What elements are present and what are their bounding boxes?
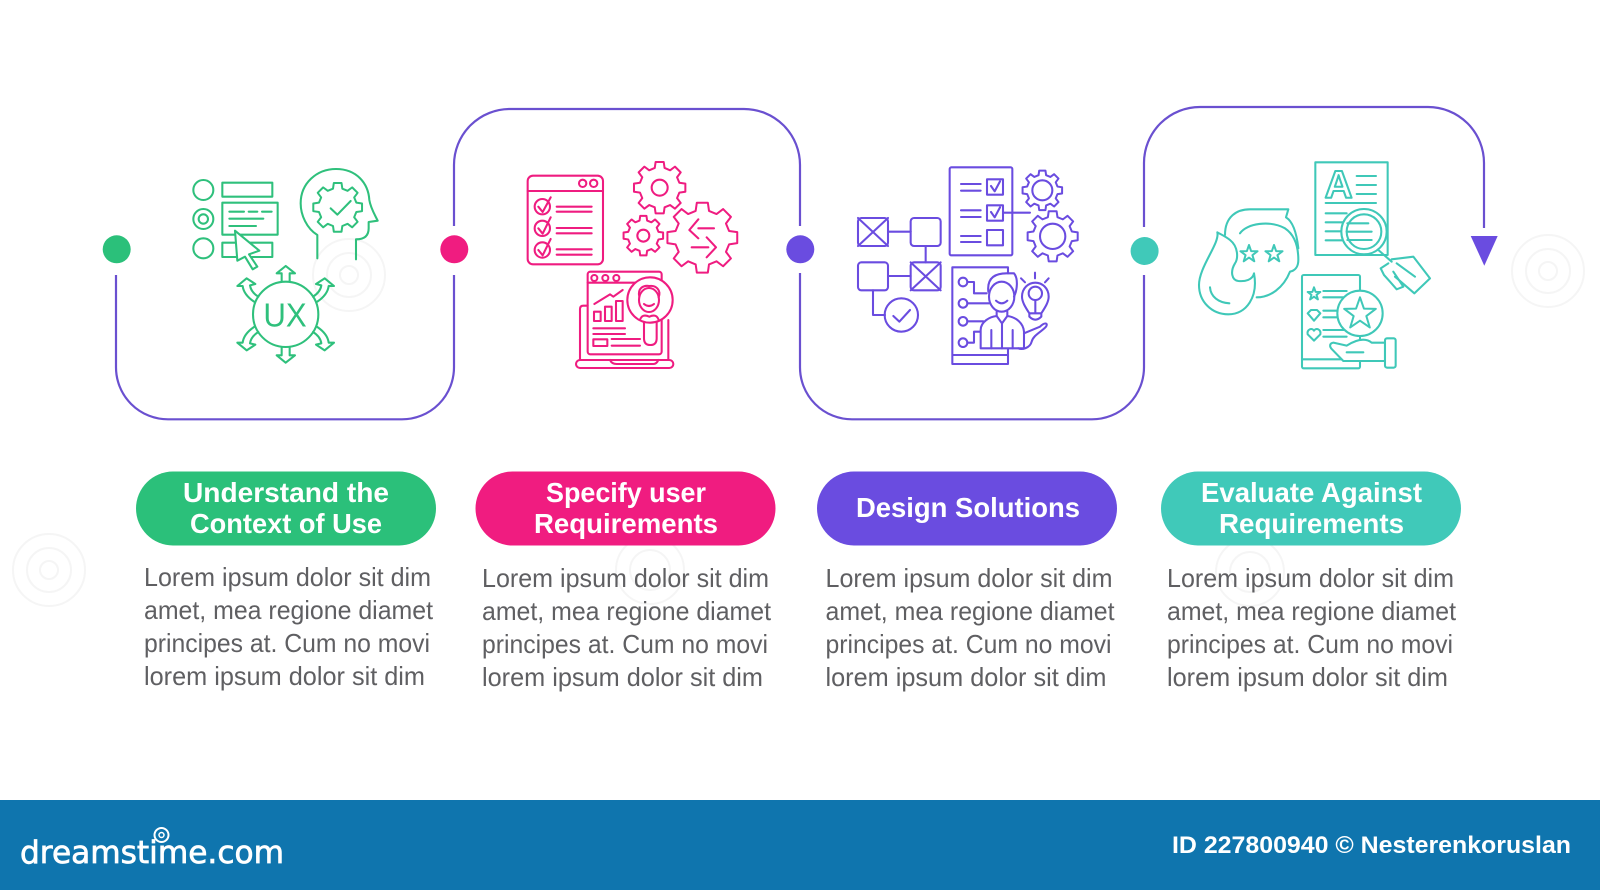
- heading: step 4: Evaluate Against: [1201, 477, 1422, 508]
- step marker: pink dot: [440, 235, 468, 263]
- text block: step 1: principes at. Cum no movi: [144, 628, 430, 658]
- icon: evaluate requirements: [1199, 162, 1430, 368]
- heading: step 2: Specify user: [546, 477, 706, 508]
- text block: step 2: principes at. Cum no movi: [482, 629, 768, 659]
- text block: step 4: principes at. Cum no movi: [1167, 629, 1453, 659]
- text block: step 3: lorem ipsum dolor sit dim: [826, 662, 1106, 692]
- text block: step 1: amet, mea regione diamet: [144, 595, 434, 625]
- panel: step 4 label: [1161, 472, 1461, 692]
- icon: evaluate requirements: A: [1325, 163, 1353, 207]
- heading: step 3: Design Solutions: [856, 492, 1080, 523]
- text block: step 3: Lorem ipsum dolor sit dim: [826, 563, 1112, 593]
- panel: step 2 label: [476, 472, 776, 692]
- footer bar: [0, 800, 1600, 890]
- text block: step 1: Lorem ipsum dolor sit dim: [144, 562, 431, 592]
- process connector line: [116, 107, 1484, 419]
- footer credit: ID 227800940 © Nesterenkoruslan: [1172, 832, 1571, 859]
- text block: step 2: Lorem ipsum dolor sit dim: [482, 563, 769, 593]
- text block: step 1: lorem ipsum dolor sit dim: [144, 661, 425, 691]
- step marker: teal dot: [1131, 237, 1159, 265]
- arrow head: [1471, 236, 1498, 266]
- heading: step 2: [534, 477, 718, 539]
- text block: step 3: amet, mea regione diamet: [826, 596, 1115, 626]
- footer logo: dreamstime.com: [20, 835, 284, 871]
- text block: step 1: [144, 562, 434, 691]
- heading: step 1: Understand the: [183, 477, 389, 508]
- heading: step 4: Requirements: [1219, 508, 1404, 539]
- panel: step 1 label: [136, 472, 436, 691]
- text block: step 3: [826, 563, 1115, 692]
- text block: step 4: lorem ipsum dolor sit dim: [1167, 662, 1448, 692]
- panel: step 3 label: [817, 472, 1117, 692]
- text block: step 4: Lorem ipsum dolor sit dim: [1167, 563, 1454, 593]
- pill: understand the context: [136, 472, 436, 546]
- heading: step 2: Requirements: [534, 508, 718, 539]
- heading: step 1: [183, 477, 389, 539]
- text block: step 4: [1167, 563, 1457, 692]
- icon: user requirements: [528, 162, 737, 368]
- pill: specify user requirements: [476, 472, 776, 546]
- step marker: purple dot: [786, 235, 814, 263]
- text block: step 2: lorem ipsum dolor sit dim: [482, 662, 763, 692]
- text block: step 2: [482, 563, 772, 692]
- icon: design solutions: [858, 167, 1078, 364]
- text block: step 4: amet, mea regione diamet: [1167, 596, 1457, 626]
- step marker: green dot: [103, 235, 131, 263]
- text block: step 3: principes at. Cum no movi: [826, 629, 1112, 659]
- text block: step 2: amet, mea regione diamet: [482, 596, 772, 626]
- pill: design solutions: [817, 472, 1117, 546]
- pill: evaluate against requirements: [1161, 472, 1461, 546]
- heading: step 4: [1201, 477, 1422, 539]
- heading: step 1: Context of Use: [190, 508, 382, 539]
- icon: UX context of use: [193, 169, 378, 363]
- icon: UX context of use: UX: [263, 298, 307, 335]
